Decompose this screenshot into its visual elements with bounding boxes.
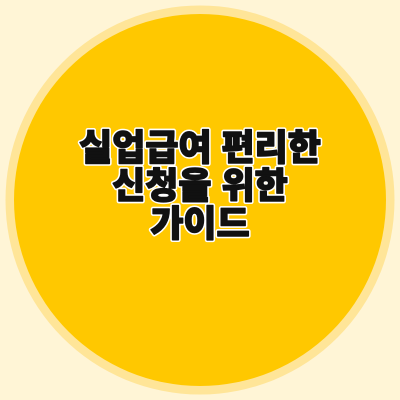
title: 실업급여 편리한 <box>79 127 321 168</box>
title: 실업급여 편리한 <box>79 127 321 168</box>
title: 가이드 <box>150 203 250 244</box>
title: 신청을 위한 <box>112 165 288 206</box>
title: 가이드 <box>150 203 250 244</box>
title: 신청을 위한 <box>112 165 288 206</box>
title <box>79 127 321 244</box>
